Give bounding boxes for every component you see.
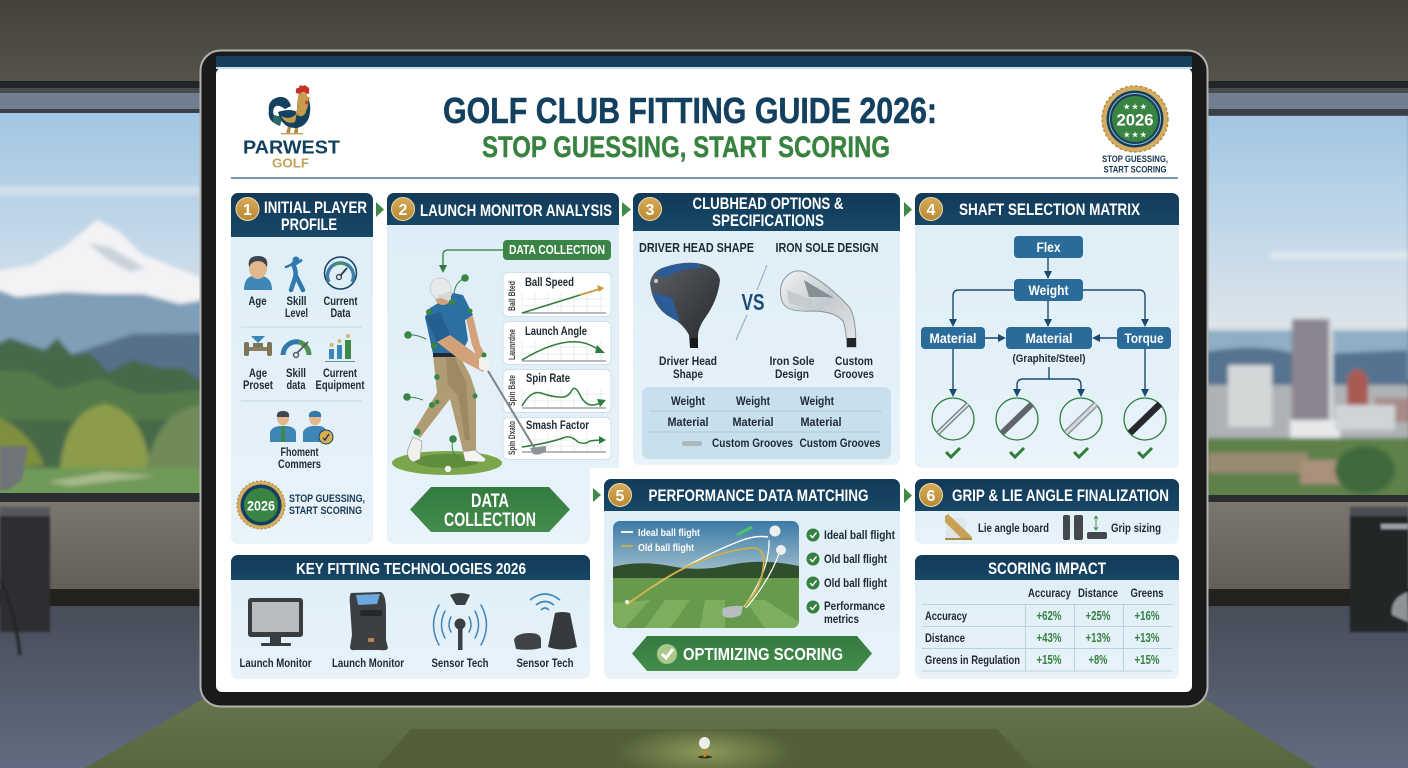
table rows: +8%	[1088, 653, 1108, 667]
flow boxes: Weight	[1028, 283, 1069, 298]
panel 6: grip and lie angle: Lie angle board	[978, 521, 1049, 535]
badge slogan: START SCORING	[289, 505, 362, 517]
technologies header	[231, 555, 590, 580]
old flight	[627, 548, 764, 606]
icon: person (age)	[244, 256, 272, 290]
specifications table: Material	[668, 415, 708, 429]
shoes	[408, 437, 422, 462]
table rows: +13%	[1134, 631, 1160, 645]
banner: optimizing scoring: OPTIMIZING SCORING	[683, 644, 843, 664]
check list: Performance	[824, 599, 885, 613]
image legend	[621, 527, 700, 554]
panel 6 header: 6	[927, 488, 936, 505]
table column headers	[1028, 586, 1164, 600]
flow boxes: Material	[930, 331, 976, 346]
banner: optimizing scoring	[632, 636, 872, 671]
technology labels: Sensor Tech	[432, 656, 488, 670]
chart: spin rate: Spin Rate	[526, 371, 570, 385]
specifications table	[642, 387, 891, 459]
chart: ball speed: Ball Bted	[507, 281, 517, 311]
left forearm	[437, 335, 487, 372]
panel 4 header	[915, 193, 1179, 225]
image legend: Ideal ball flight	[638, 527, 700, 539]
panel 6: grip and lie angle: Grip sizing	[1111, 521, 1161, 535]
panel 2 header: LAUNCH MONITOR ANALYSIS	[420, 201, 612, 220]
shirt	[425, 293, 473, 357]
panel 6 header	[915, 479, 1179, 511]
panel 6: grip and lie angle	[915, 479, 1179, 544]
icon: lie angle board	[945, 514, 972, 540]
left sleeve	[425, 312, 450, 342]
table column headers: Greens	[1130, 586, 1164, 600]
chart: smash factor: Smash Factor	[526, 418, 589, 432]
check list: Old ball flight	[824, 552, 887, 566]
badge caption	[1102, 154, 1168, 174]
table rows: +43%	[1036, 631, 1062, 645]
labels row 2: Age	[249, 366, 267, 380]
flow connectors	[953, 258, 1145, 395]
ball flight image	[613, 521, 799, 628]
left desk and chair	[0, 446, 50, 655]
technology labels: Sensor Tech	[516, 656, 574, 670]
table column headers: Accuracy	[1028, 586, 1071, 600]
technology labels: Launch Monitor	[240, 656, 312, 670]
check list: Ideal ball flight	[824, 528, 895, 542]
table rows: Accuracy	[925, 609, 967, 623]
driver head	[650, 263, 720, 348]
vs divider	[736, 265, 767, 340]
chart: ball speed	[503, 272, 611, 316]
badge caption: STOP GUESSING,	[1102, 154, 1168, 164]
badge: 2026 small: 2026	[247, 498, 275, 514]
specifications table: Custom Grooves	[800, 436, 881, 450]
labels row 2	[243, 366, 365, 392]
tablet frame	[200, 50, 1208, 706]
panel 1 header: 1	[243, 202, 252, 219]
panel 3 header: 3	[646, 202, 655, 219]
panel: key fitting technologies	[231, 555, 590, 679]
right desk	[1350, 507, 1408, 632]
panel 4: shaft selection matrix	[915, 193, 1179, 468]
scoring header	[915, 555, 1179, 580]
labels row 2: Proset	[243, 378, 273, 392]
table grid	[922, 604, 1172, 671]
check list	[806, 528, 895, 626]
panel 5 header: PERFORMANCE DATA MATCHING	[648, 486, 868, 505]
panel 2: launch monitor analysis	[387, 193, 619, 544]
labels row 1: Level	[285, 306, 308, 320]
icon: two fitters	[270, 410, 333, 444]
ideal flight	[627, 536, 768, 604]
panel 4 header: 4	[927, 202, 936, 219]
icon: launch monitor screen	[248, 598, 303, 646]
badge: 2026 top right: ★ ★ ★	[1124, 103, 1147, 111]
head and cap	[435, 289, 451, 305]
table rows: +13%	[1086, 631, 1110, 645]
technology labels	[240, 656, 574, 670]
logo: Parwest Golf: GOLF	[272, 156, 309, 170]
tag: data collection with arrow: DATA COLLECTION	[509, 243, 605, 257]
title	[443, 90, 937, 164]
sensor markers	[403, 274, 486, 458]
club labels: Iron Sole	[770, 354, 815, 368]
chart: smash factor	[503, 418, 611, 460]
label: commers: Fhoment	[280, 445, 318, 459]
labels row 2: Equipment	[316, 378, 365, 392]
table rows: +62%	[1036, 609, 1062, 623]
icon: grip sizing	[1063, 515, 1107, 540]
labels row 2: data	[286, 378, 306, 392]
check list: Old ball flight	[824, 576, 887, 590]
putting mat	[85, 698, 1316, 768]
badge caption: START SCORING	[1104, 164, 1166, 174]
panel 6 header: GRIP & LIE ANGLE FINALIZATION	[952, 486, 1169, 505]
chart: spin rate: Spin Bate	[507, 375, 517, 406]
panel 1 header: INITIAL PLAYER	[264, 198, 367, 217]
golf ball on tee	[698, 737, 712, 758]
panel 2 header	[387, 193, 619, 225]
comparison headings	[639, 240, 878, 255]
specifications table: Weight	[800, 394, 834, 408]
right arm	[466, 316, 488, 366]
trousers	[413, 354, 476, 451]
table rows: +15%	[1036, 653, 1062, 667]
panel 5 header	[604, 479, 900, 511]
tag: data collection with arrow	[443, 240, 611, 271]
panel 4 header: SHAFT SELECTION MATRIX	[959, 200, 1141, 219]
technologies header: KEY FITTING TECHNOLOGIES 2026	[296, 561, 526, 578]
icon: dumbbell with heart	[244, 336, 272, 356]
golf club over charts	[488, 371, 546, 455]
flow arrows between steps	[376, 202, 912, 503]
club labels: Driver Head	[659, 354, 717, 368]
badge: 2026 top right	[1102, 86, 1168, 174]
chart: launch angle: Launrdne	[507, 329, 517, 360]
check list: metrics	[824, 612, 859, 626]
wordmark: PARWEST	[243, 138, 340, 158]
table rows: +25%	[1086, 609, 1110, 623]
logo: Parwest Golf	[243, 85, 340, 170]
iron head	[780, 271, 856, 347]
badge slogan	[289, 493, 365, 517]
title: GOLF CLUB FITTING GUIDE 2026:	[443, 90, 937, 131]
badge slogan: STOP GUESSING,	[289, 493, 365, 505]
specifications table: Weight	[736, 394, 770, 408]
icon: sensor tech base units	[514, 594, 577, 650]
comparison headings: DRIVER HEAD SHAPE	[639, 240, 754, 255]
table column headers: Distance	[1078, 586, 1118, 600]
tee mat with glow	[377, 726, 1033, 768]
label: commers	[278, 445, 321, 471]
club labels: Shape	[673, 367, 703, 381]
table rows: +15%	[1134, 653, 1160, 667]
labels row 2: Current	[323, 366, 357, 380]
badge: 2026 top right: ★ ★ ★	[1124, 131, 1147, 139]
banner: data collection: COLLECTION	[444, 510, 536, 531]
flow boxes: Material	[1026, 331, 1072, 346]
panel 2 header: 2	[399, 202, 408, 219]
chart: smash factor: Spin Dxato	[507, 421, 517, 455]
left window view: mountain and trees	[0, 105, 205, 498]
icon: sensor tech with waves	[434, 593, 486, 650]
table rows: Distance	[925, 631, 965, 645]
banner: data collection: DATA	[471, 491, 509, 512]
icon: half gauge	[283, 342, 309, 358]
golfer illustration	[392, 278, 502, 475]
shaft circles	[932, 398, 1166, 440]
panel 3 header: SPECIFICATIONS	[712, 211, 824, 230]
panel 1: initial player profile	[231, 193, 373, 544]
flow boxes	[921, 236, 1171, 365]
panel 5 header: 5	[616, 488, 625, 505]
chart: launch angle	[503, 322, 611, 364]
panel: scoring impact table	[915, 555, 1179, 679]
table rows	[925, 609, 1160, 667]
chart: ball speed: Ball Speed	[525, 275, 574, 289]
chart: launch angle: Launch Angle	[525, 324, 587, 338]
badge: 2026 top right: 2026	[1116, 110, 1154, 130]
specifications table: Custom Grooves	[712, 436, 793, 450]
glove	[479, 357, 489, 370]
panel 3 header: CLUBHEAD OPTIONS &	[692, 194, 844, 213]
label: commers: Commers	[278, 457, 321, 471]
banner: data collection	[410, 487, 570, 532]
panel 1 header: PROFILE	[281, 215, 337, 234]
club labels: Grooves	[834, 367, 874, 381]
panel 3: clubhead options	[633, 193, 900, 465]
labels row 1: Data	[330, 306, 351, 320]
labels row 1	[248, 294, 358, 320]
table rows: +16%	[1134, 609, 1160, 623]
labels row 1: Skill	[286, 294, 306, 308]
check marks	[946, 448, 1152, 457]
badge: 2026 small	[237, 481, 285, 529]
club labels	[659, 354, 874, 381]
club labels: Custom	[835, 354, 873, 368]
icon: bars	[325, 334, 355, 362]
labels row 1: Current	[324, 294, 358, 308]
vs divider: VS	[742, 289, 764, 315]
panel 5: performance data matching	[604, 479, 900, 679]
specifications table: Material	[732, 415, 774, 429]
technology labels: Launch Monitor	[332, 656, 404, 670]
flow boxes: Flex	[1036, 240, 1061, 255]
scoring header: SCORING IMPACT	[988, 559, 1106, 578]
icon: golfer (skill level)	[286, 256, 303, 290]
icon: gauge (current data)	[324, 257, 356, 289]
flow boxes: Torque	[1124, 331, 1164, 346]
panel 3 header	[633, 193, 900, 231]
icon: launch monitor kiosk	[350, 592, 388, 650]
specifications table: Material	[800, 415, 842, 429]
labels row 1: Age	[248, 294, 267, 308]
panel 1 header	[231, 193, 373, 237]
right window view: city skyline	[1205, 110, 1408, 500]
chart: spin rate	[503, 370, 611, 412]
subtitle: STOP GUESSING, START SCORING	[482, 131, 890, 164]
club labels: Design	[775, 367, 809, 381]
table rows: Greens in Regulation	[925, 653, 1020, 667]
specifications table: Weight	[671, 394, 705, 408]
image legend: Old ball flight	[638, 542, 694, 554]
comparison headings: IRON SOLE DESIGN	[776, 240, 878, 255]
icon: rooster	[269, 85, 311, 134]
iron on turf	[722, 606, 743, 618]
labels row 2: Skill	[286, 366, 306, 380]
flow boxes: (Graphite/Steel)	[1012, 353, 1086, 365]
